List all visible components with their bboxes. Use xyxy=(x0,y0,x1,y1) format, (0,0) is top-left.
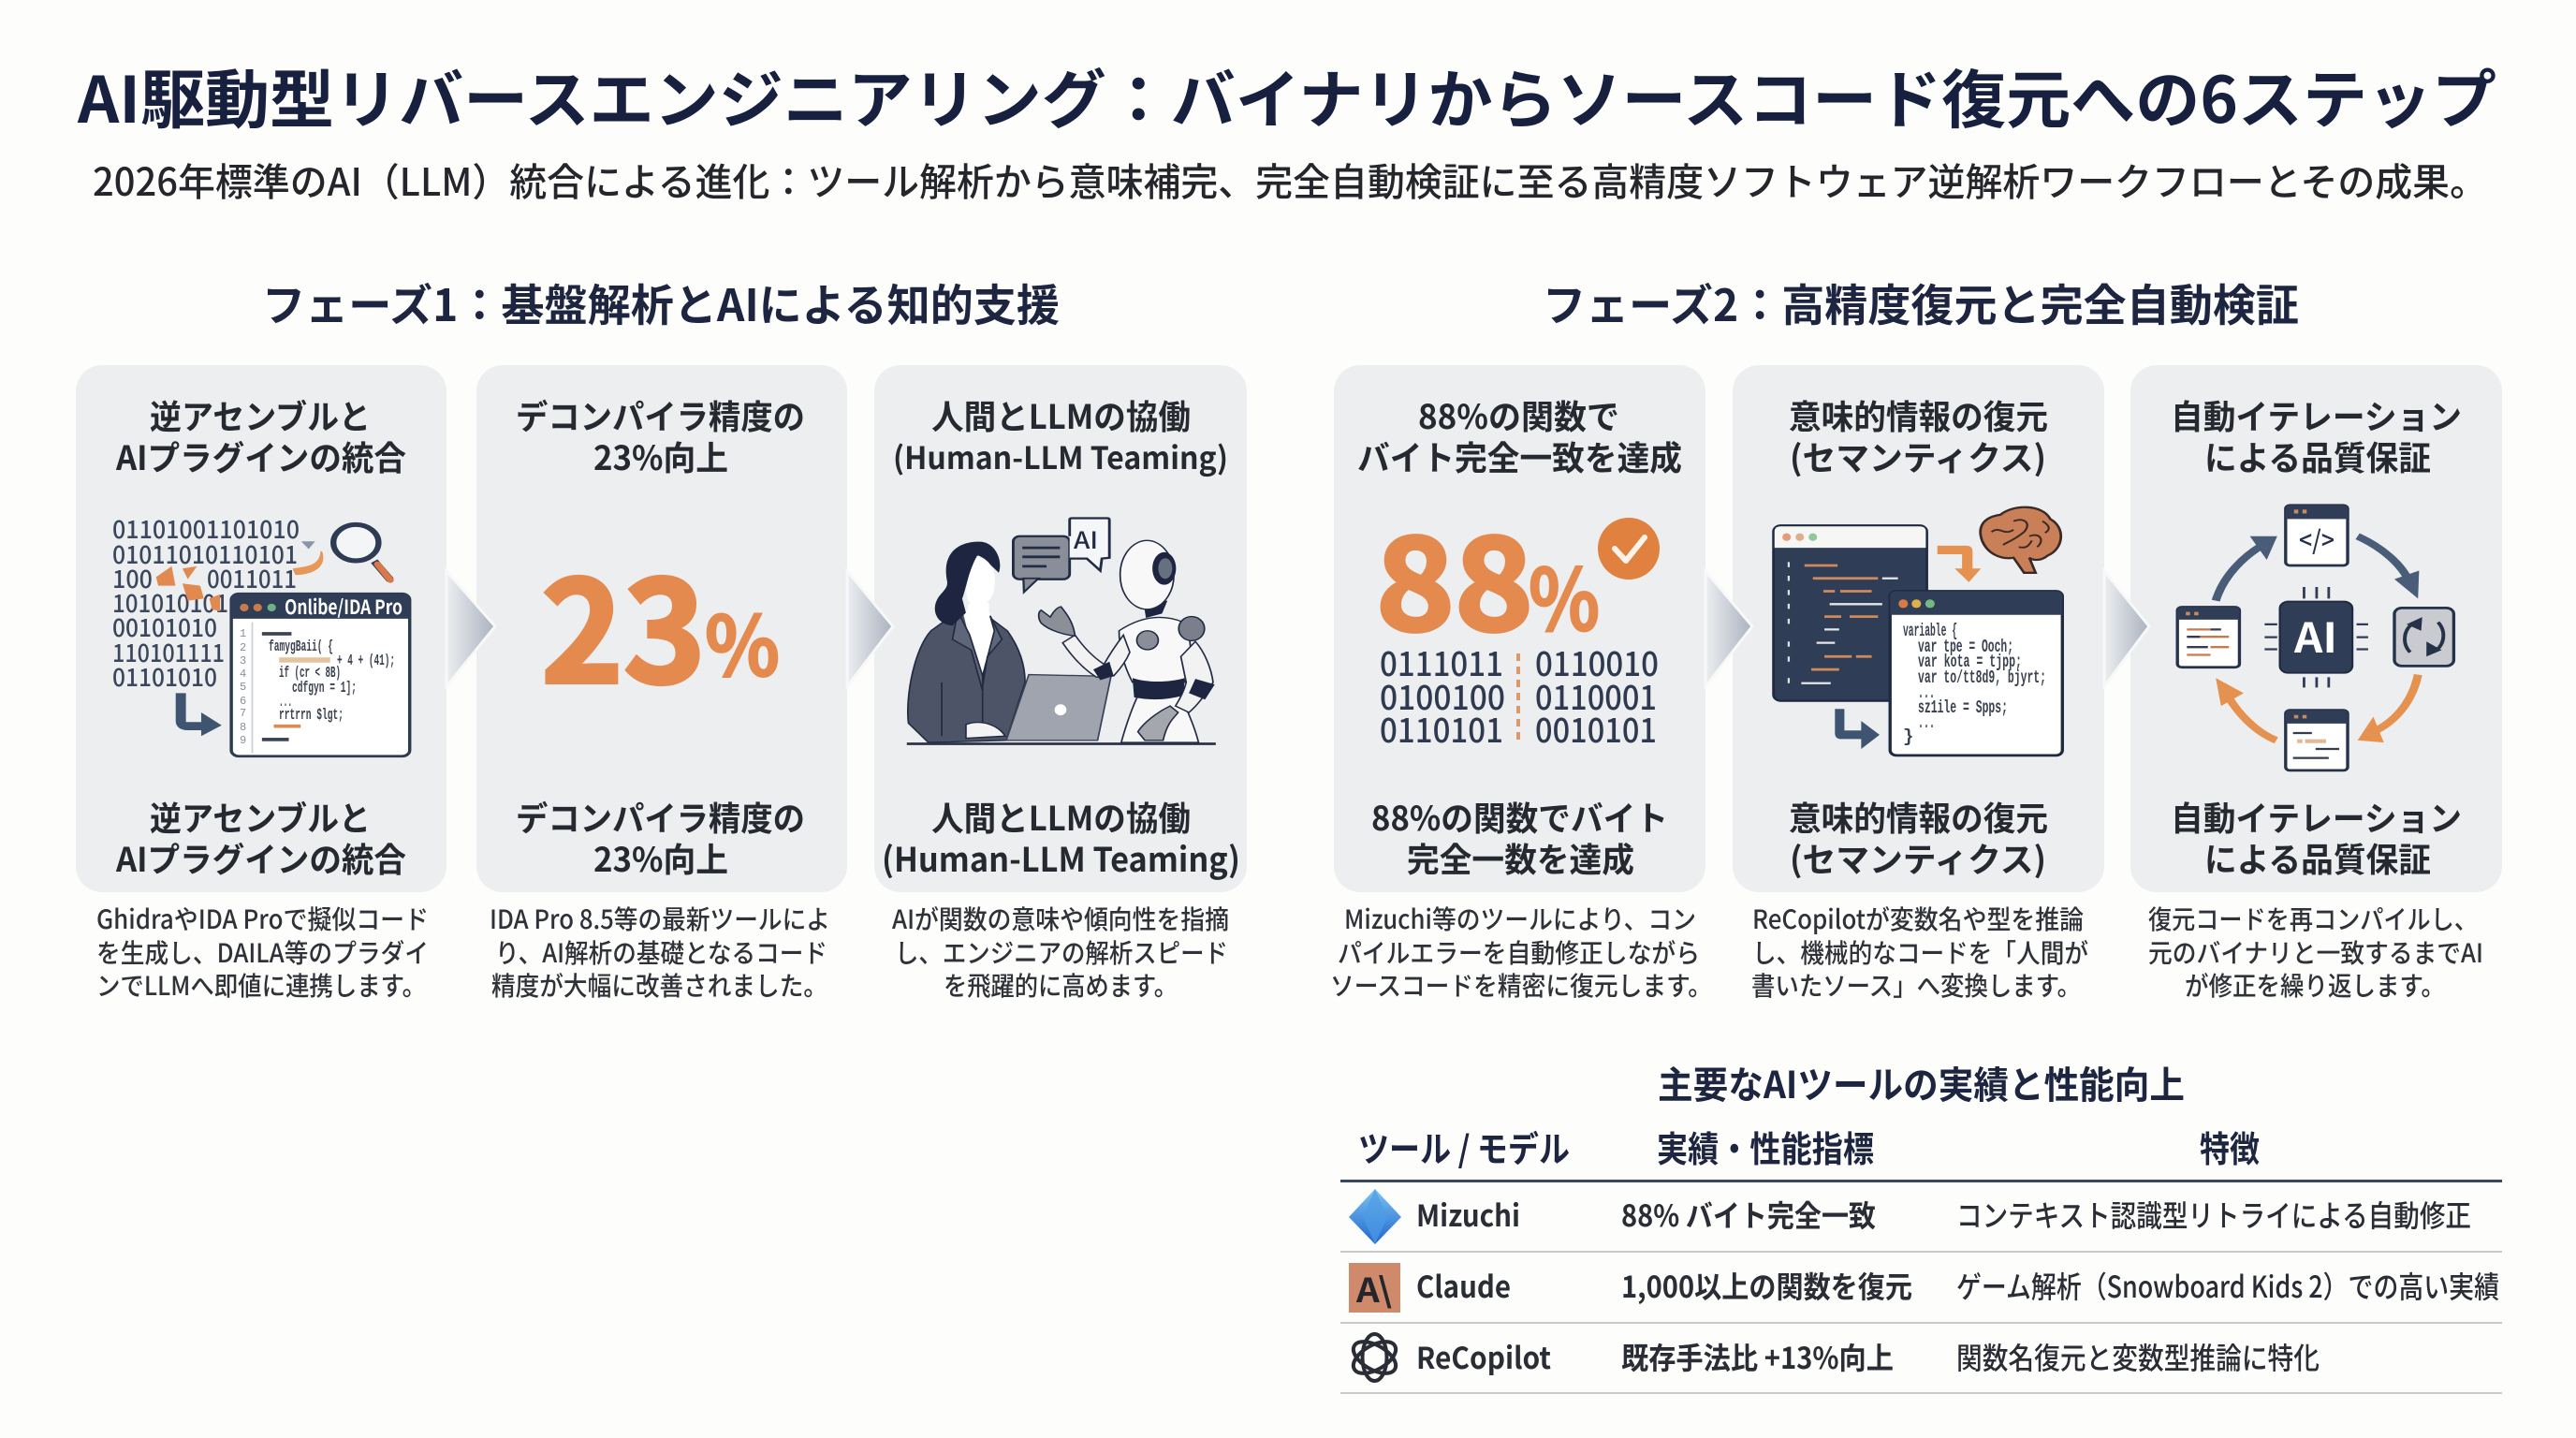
icon: binary to code window: famygBaii( { xyxy=(269,638,333,656)
text block: step 5 description: 書いたソース」へ変換します。 xyxy=(1751,966,2081,1004)
icon: code windows and brain: sz1ile = Spps; xyxy=(1918,697,2008,718)
panel: step 6 iteration: 自動イテレーション xyxy=(2171,792,2462,841)
text block: step 3 description xyxy=(892,900,1229,1004)
panel: step 5 semantics xyxy=(1733,365,2104,892)
icon: binary to code window: 100 xyxy=(112,561,153,595)
panel: step 5 semantics: (セマンティクス) xyxy=(1790,833,2046,882)
text block: step 6 description: が修正を繰り返します。 xyxy=(2185,966,2445,1004)
text block: step 1 description: を生成し、DAILA等のプラダイ xyxy=(96,933,429,971)
binary columns xyxy=(1380,638,1659,753)
text block: step 2 description: 精度が大幅に改善されました。 xyxy=(491,966,827,1004)
panel: step 4 byte match: 88%の関数で xyxy=(1418,390,1619,439)
icon: binary to code window: rrtrrn $lgt; xyxy=(279,707,344,725)
panel: step 5 semantics: (セマンティクス) xyxy=(1790,432,2046,480)
panel: step 2 decompiler accuracy: 23%向上 xyxy=(593,432,728,480)
panel: step 4 byte match xyxy=(1334,365,1705,892)
icon: binary to code window: 0011011 xyxy=(207,561,297,595)
panel: step 4 byte match: 完全一数を達成 xyxy=(1407,833,1634,882)
text block: step 3 description: AIが関数の意味や傾向性を指摘 xyxy=(892,900,1229,937)
text block: step 3 description: し、エンジニアの解析スピード xyxy=(895,933,1228,971)
panel: step 2 decompiler accuracy: デコンパイラ精度の xyxy=(516,390,805,439)
binary columns: 0110001 xyxy=(1535,672,1657,720)
text block: step 2 description: IDA Pro 8.5等の最新ツールによ xyxy=(490,900,830,937)
row: ReCopilot: 既存手法比 +13%向上 xyxy=(1621,1335,1894,1378)
binary columns: 0100100 xyxy=(1380,672,1505,720)
icon: binary to code window: 101010101 xyxy=(112,585,228,620)
panel: step 5 semantics: 意味的情報の復元 xyxy=(1789,390,2048,439)
text block: step 5 description: し、機械的なコードを「人間が xyxy=(1752,933,2088,971)
panel: step 3 human-LLM teaming: (Human-LLM Teaming) xyxy=(882,833,1240,882)
panel: step 5 semantics: 意味的情報の復元 xyxy=(1789,792,2048,841)
heading: tools table: 主要なAIツールの実績と性能向上 xyxy=(1658,1055,2185,1109)
panel: step 1 disassembly: 逆アセンブルと xyxy=(150,390,371,439)
icon: binary to code window xyxy=(112,511,410,756)
subtitle: 2026年標準のAI（LLM）統合による進化：ツール解析から意味補完、完全自動検証に至る高精度ソフトウェア逆解析ワークフローとその成果。 xyxy=(93,151,2487,207)
arrow: step 5 to 6 xyxy=(2104,571,2149,686)
panel: step 2 decompiler accuracy: 23%向上 xyxy=(593,833,728,882)
icon: code windows and brain: var to/tt8d9, bjyrt; xyxy=(1918,668,2046,688)
table: AI tools: 実績・性能指標 xyxy=(1657,1121,1874,1172)
binary columns: 0010101 xyxy=(1535,705,1657,753)
icon: code windows and brain xyxy=(1774,507,2062,756)
stat: 23 percent: 23 xyxy=(541,521,706,724)
icon: binary to code window: 1 xyxy=(240,627,246,640)
panel: step 2 decompiler accuracy: デコンパイラ精度の xyxy=(516,792,805,841)
panel: step 6 iteration xyxy=(2130,365,2502,892)
panel: step 3 human-LLM teaming: (Human-LLM Teaming) xyxy=(893,433,1228,478)
text block: step 4 description: ソースコードを精密に復元します。 xyxy=(1330,966,1712,1004)
panel: step 1 disassembly: 逆アセンブルと xyxy=(150,792,371,841)
binary columns: 0110101 xyxy=(1380,705,1503,753)
panel: step 3 human-LLM teaming: 人間とLLMの協働 xyxy=(931,390,1191,439)
heading: phase 2: フェーズ2：高精度復元と完全自動検証 xyxy=(1543,270,2299,334)
panel: step 1 disassembly: AIプラグインの統合 xyxy=(115,833,406,882)
text block: step 3 description: を飛躍的に高めます。 xyxy=(944,966,1178,1004)
icon: binary to code window: + 4 + (41); xyxy=(337,653,395,670)
stat: 23 percent: % xyxy=(705,581,780,700)
icon: binary to code window: 00101010 xyxy=(112,609,217,644)
stat: 88 percent with check xyxy=(1376,485,1660,667)
stat: 23 percent xyxy=(541,521,780,724)
icon: binary to code window: 6 xyxy=(240,695,246,708)
icon: binary to code window: 01101010 xyxy=(112,659,217,694)
binary columns: 0111011 xyxy=(1380,638,1503,686)
text block: step 1 description: ンでLLMへ即値に連携します。 xyxy=(96,966,426,1004)
text block: step 2 description xyxy=(490,900,830,1004)
text block: step 4 description xyxy=(1330,900,1712,1004)
icon: binary to code window: 01101001101010 xyxy=(112,511,300,546)
row: Claude: 1,000以上の関数を復元 xyxy=(1621,1264,1912,1307)
text block: step 4 description: Mizuchi等のツールにより、コン xyxy=(1344,900,1696,937)
icon: binary to code window: 3 xyxy=(240,654,246,668)
panel: step 3 human-LLM teaming xyxy=(874,365,1247,892)
panel: step 6 iteration: による品質保証 xyxy=(2204,432,2431,480)
panel: step 4 byte match: 88%の関数でバイト xyxy=(1371,792,1668,841)
stat: 88 percent with check: % xyxy=(1529,533,1600,654)
icon: binary to code window: 8 xyxy=(240,721,246,734)
arrow: step 1 to 2 xyxy=(446,571,495,686)
panel: step 6 iteration: による品質保証 xyxy=(2204,833,2431,882)
row: ReCopilot: ReCopilot xyxy=(1416,1335,1551,1378)
text block: step 2 description: り、AI解析の基礎となるコード xyxy=(495,933,827,971)
text block: step 5 description: ReCopilotが変数名や型を推論 xyxy=(1752,900,2084,937)
text block: step 4 description: パイルエラーを自動修正しながら xyxy=(1338,933,1700,971)
icon: binary to code window: 01011010110101 xyxy=(112,536,298,571)
icon: binary to code window: 5 xyxy=(240,681,246,694)
row: Mizuchi: Mizuchi xyxy=(1416,1193,1520,1236)
text block: step 5 description xyxy=(1751,900,2088,1004)
panel: step 4 byte match: バイト完全一致を達成 xyxy=(1357,432,1682,480)
icon: AI iteration cycle xyxy=(2177,506,2453,770)
row: Claude: A\ xyxy=(1355,1264,1392,1313)
table: AI tools: 特徴 xyxy=(2200,1121,2260,1172)
icon: binary to code window: Onlibe/IDA Pro xyxy=(285,593,402,621)
row: ReCopilot xyxy=(1348,1334,2320,1381)
icon: binary to code window: 9 xyxy=(240,734,246,747)
icon: binary to code window: 4 xyxy=(240,668,246,681)
table: AI tools: ツール / モデル xyxy=(1358,1121,1570,1172)
heading: phase 1: フェーズ1：基盤解析とAIによる知的支援 xyxy=(262,270,1060,334)
title: AI駆動型リバースエンジニアリング：バイナリからソースコード復元への6ステップ xyxy=(77,49,2496,141)
row: Claude: Claude xyxy=(1416,1264,1511,1307)
icon: code windows and brain: } xyxy=(1903,726,1913,747)
icon: human and robot at laptop xyxy=(907,519,1216,743)
row: Mizuchi: 88% バイト完全一致 xyxy=(1621,1193,1876,1236)
icon: code windows and brain: variable { xyxy=(1903,621,1957,641)
icon: binary to code window: 110101111 xyxy=(112,635,225,669)
row: ReCopilot: 関数名復元と変数型推論に特化 xyxy=(1956,1335,2320,1378)
icon: code windows and brain: ... xyxy=(1918,682,1935,703)
panel: step 1 disassembly xyxy=(76,365,446,892)
icon: binary to code window: 2 xyxy=(240,641,246,654)
icon: binary to code window: 7 xyxy=(240,707,246,720)
stat: 88 percent with check: 88 xyxy=(1376,485,1533,667)
text block: step 1 description xyxy=(96,900,429,1004)
panel: step 1 disassembly: AIプラグインの統合 xyxy=(115,432,406,480)
icon: binary to code window: if (cr < 8B) xyxy=(279,665,341,682)
row: Mizuchi: コンテキスト認識型リトライによる自動修正 xyxy=(1956,1193,2471,1236)
panel: step 6 iteration: 自動イテレーション xyxy=(2171,390,2462,439)
row: Mizuchi xyxy=(1349,1189,2471,1244)
text block: step 6 description: 元のバイナリと一致するまでAI xyxy=(2148,933,2483,971)
arrow: step 2 to 3 xyxy=(847,571,893,686)
icon: code windows and brain: var tpe = Ooch; xyxy=(1918,637,2013,657)
icon: code windows and brain: ... xyxy=(1918,712,1935,733)
icon: AI iteration cycle: </> xyxy=(2299,521,2334,558)
table: AI tools xyxy=(1340,1121,2502,1394)
panel: step 2 decompiler accuracy xyxy=(476,365,847,892)
icon: AI iteration cycle: AI xyxy=(2293,605,2337,665)
icon: code windows and brain: var kota = tjpp; xyxy=(1918,652,2022,672)
panel: step 3 human-LLM teaming: 人間とLLMの協働 xyxy=(931,792,1191,841)
text block: step 6 description xyxy=(2148,900,2483,1004)
icon: binary to code window: ... xyxy=(279,694,292,712)
icon: binary to code window: cdfgyn = 1]; xyxy=(292,680,357,697)
binary columns: 0110010 xyxy=(1535,638,1659,686)
text block: step 1 description: GhidraやIDA Proで擬似コード xyxy=(96,900,429,937)
arrow: step 4 to 5 xyxy=(1705,571,1752,686)
icon: human and robot at laptop: AI xyxy=(1074,522,1098,556)
text block: step 6 description: 復元コードを再コンパイルし、 xyxy=(2148,900,2478,937)
row: Claude xyxy=(1349,1263,2499,1313)
